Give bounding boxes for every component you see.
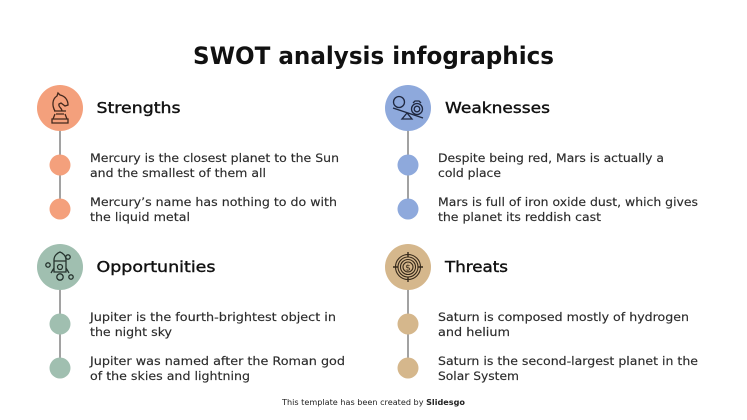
- text block 2: Mars is full of iron oxide dust, which gives: [438, 195, 698, 209]
- bullet 2: [50, 358, 70, 378]
- icon: target with dollar: $: [405, 264, 411, 274]
- title: SWOT analysis infographics: [193, 42, 554, 70]
- text block 1: Jupiter is the fourth-brightest object in: [89, 310, 336, 324]
- text block 2: the liquid metal: [90, 210, 190, 224]
- panel: strengths: [37, 85, 339, 224]
- bullet 2: [398, 198, 418, 220]
- bullet 1: [50, 314, 70, 334]
- icon: target with dollar: [385, 244, 431, 290]
- icon: chess knight: [37, 85, 83, 131]
- icon: balance scale with coins: [385, 85, 431, 131]
- bullet 1: [50, 154, 70, 176]
- text block 2: [438, 354, 698, 383]
- heading: Threats: [444, 258, 508, 276]
- panel: weaknesses: [385, 85, 698, 224]
- text block 1: cold place: [438, 166, 501, 180]
- text block 2: Solar System: [438, 369, 519, 383]
- panel: opportunities: [37, 244, 345, 383]
- text block 1: and helium: [438, 325, 510, 339]
- text block 2: the planet its reddish cast: [438, 210, 601, 224]
- heading: Weaknesses: [445, 99, 550, 117]
- text block 1: [438, 151, 664, 180]
- text block 1: [438, 310, 689, 339]
- bullet 2: [398, 358, 418, 378]
- text block 2: [90, 195, 337, 224]
- text block 1: [89, 310, 336, 339]
- heading: Opportunities: [96, 258, 216, 276]
- footer credit: This template has been created by Slidesgo: [281, 398, 465, 407]
- bullet 2: [50, 198, 70, 220]
- text block 1: Saturn is composed mostly of hydrogen: [438, 310, 689, 324]
- text block 2: [438, 195, 698, 224]
- text block 1: Mercury is the closest planet to the Sun: [90, 151, 339, 165]
- text block 2: [89, 354, 345, 383]
- text block 1: the night sky: [90, 325, 172, 339]
- panel: threats: [385, 244, 698, 383]
- text block 2: Saturn is the second-largest planet in the: [438, 354, 698, 368]
- text block 1: [90, 151, 339, 180]
- bullet 1: [398, 154, 418, 176]
- text block 2: of the skies and lightning: [90, 369, 250, 383]
- heading: Strengths: [96, 99, 180, 117]
- text block 1: and the smallest of them all: [90, 166, 266, 180]
- text block 2: Jupiter was named after the Roman god: [89, 354, 345, 368]
- text block 1: Despite being red, Mars is actually a: [438, 151, 664, 165]
- icon: rocket with coins: [37, 244, 83, 290]
- bullet 1: [398, 314, 418, 334]
- text block 2: Mercury’s name has nothing to do with: [90, 195, 337, 209]
